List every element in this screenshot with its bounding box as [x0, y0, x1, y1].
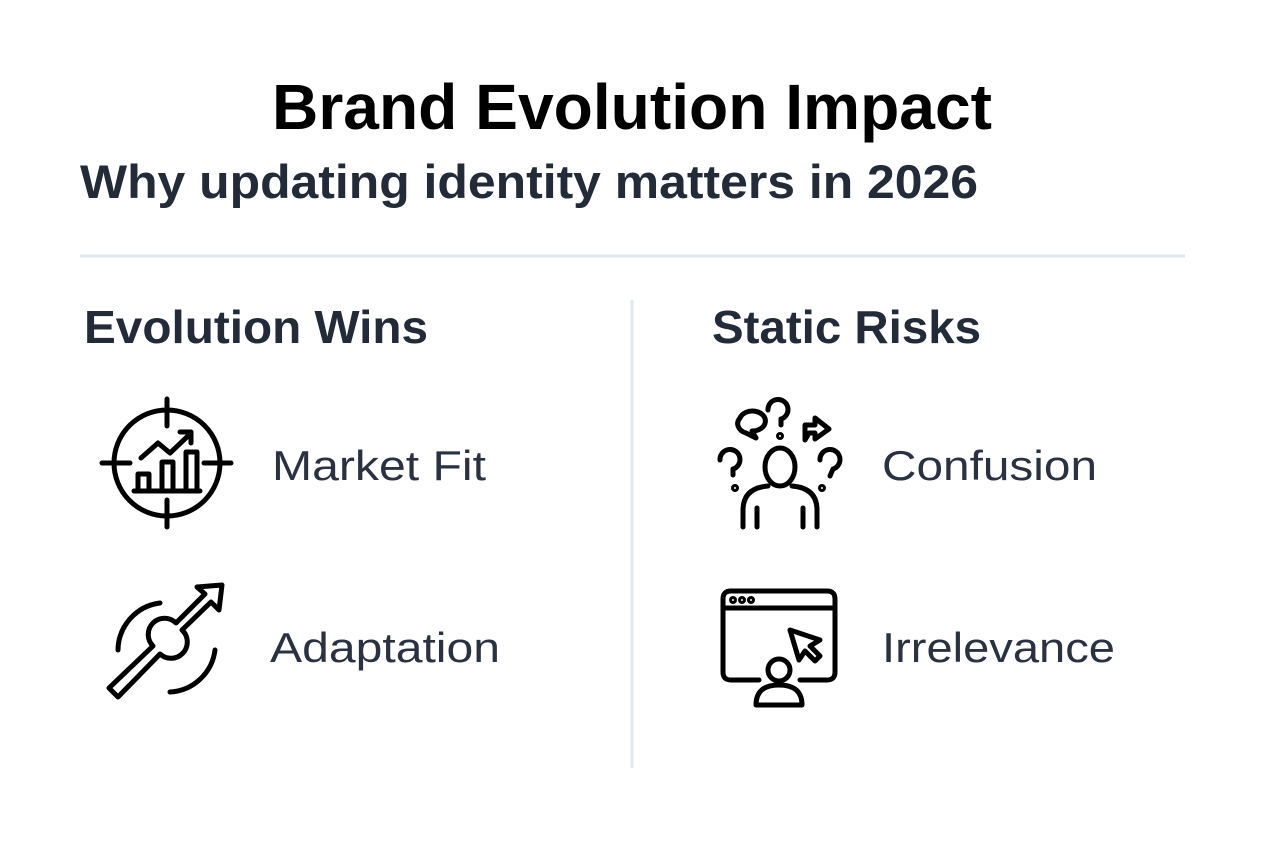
label: irrelevance: Irrelevance — [882, 624, 1115, 671]
icon: browser with user — [723, 591, 835, 705]
heading: evolution wins: Evolution Wins — [84, 301, 428, 353]
panel: evolution wins — [84, 301, 500, 697]
icon: adaptation arrow — [109, 585, 222, 697]
panel: static risks — [712, 301, 1115, 705]
label: market fit: Market Fit — [272, 442, 486, 489]
icon: confused person — [720, 399, 840, 527]
label: confusion: Confusion — [882, 442, 1097, 489]
title: Brand Evolution Impact — [272, 71, 992, 143]
heading: static risks: Static Risks — [712, 301, 981, 353]
subtitle: Why updating identity matters in 2026 — [80, 155, 978, 208]
label: adaptation: Adaptation — [270, 624, 500, 671]
icon: target chart — [102, 399, 231, 527]
